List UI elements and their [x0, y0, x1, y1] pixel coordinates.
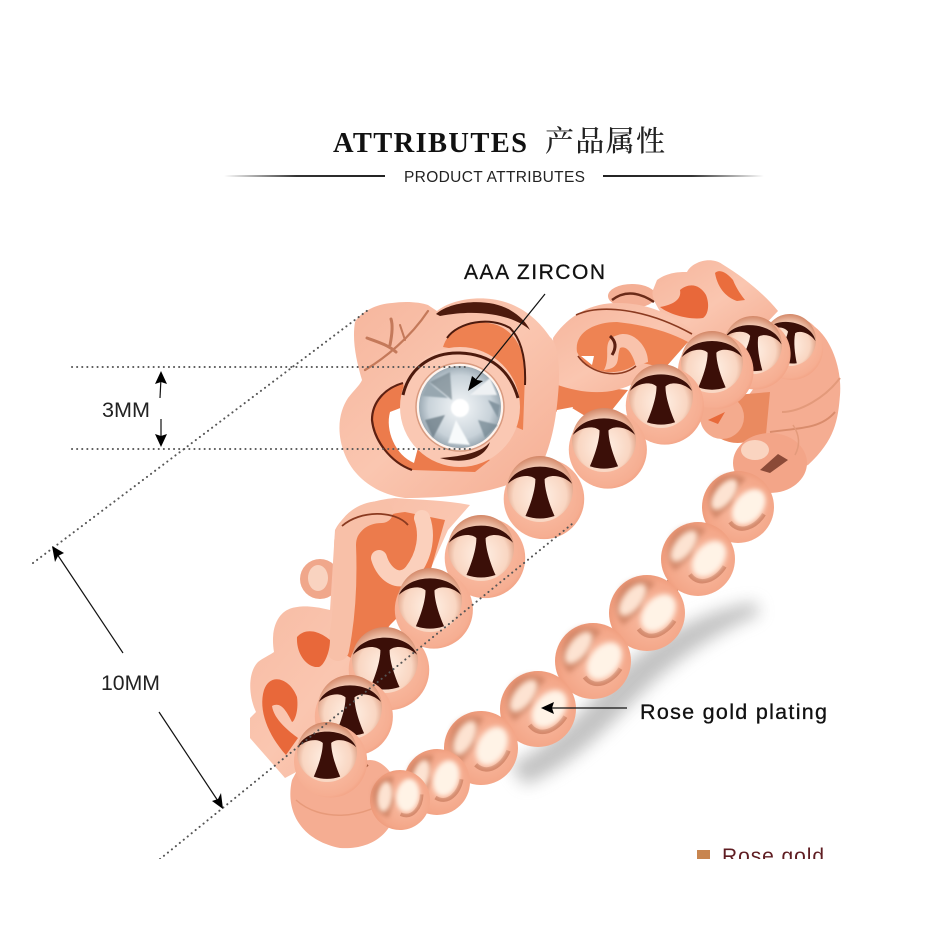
- dimension: 3mm: [102, 371, 167, 447]
- arrow: [541, 702, 627, 714]
- ring shadow on ground: [510, 602, 760, 785]
- callout: AAA zircon: [464, 261, 605, 391]
- arrow: [468, 294, 545, 391]
- legend label: Rose gold: [722, 845, 824, 868]
- ring illustration: [250, 260, 840, 848]
- label: AAA ZIRCON: [464, 261, 605, 284]
- S strand: [338, 512, 382, 650]
- band beads: [359, 471, 774, 841]
- back of band: far beads: [700, 327, 840, 493]
- back scroll: small beads behind crown: [300, 284, 656, 599]
- arrow up-left: [52, 546, 123, 653]
- legend: rose gold swatch clipped: [697, 845, 824, 868]
- label: Rose gold plating: [640, 700, 827, 724]
- title: attributes: ATTRIBUTES: [333, 128, 527, 159]
- arrow up: [155, 371, 167, 398]
- leaf engraving: [365, 311, 428, 370]
- crown: left scroll with orange interior: [250, 498, 470, 778]
- heading block: [224, 125, 764, 186]
- rule right: [603, 175, 764, 177]
- crown: heart centre: [339, 298, 559, 498]
- connectors between beads: [497, 574, 684, 743]
- orange hollow left of stone: [372, 383, 490, 472]
- arrow down-right: [159, 712, 223, 809]
- crown: right scroll with orange interior: [546, 303, 700, 452]
- crown: top right scroll: [652, 260, 778, 345]
- callout: rose gold plating: [541, 700, 827, 724]
- label 3MM: 3MM: [102, 399, 150, 422]
- top dark streak: [436, 302, 530, 330]
- label 10MM: 10MM: [101, 672, 160, 695]
- zircon stone in bezel: [400, 347, 520, 467]
- arrow down: [155, 419, 167, 447]
- swatch: [697, 850, 710, 860]
- reflective beads on crown rim: [294, 309, 829, 798]
- hook strand: [379, 518, 425, 578]
- title: chinese: 产品属性: [545, 125, 665, 158]
- orange hollow right of stone: [443, 322, 525, 430]
- dimension: 10mm: [52, 546, 223, 809]
- subtitle: PRODUCT ATTRIBUTES: [404, 169, 585, 186]
- rule left: [224, 175, 385, 177]
- white crop strip along the bottom: [0, 859, 952, 952]
- orange behind strip: [556, 383, 628, 425]
- dimension guide lines: [33, 310, 572, 859]
- stacked beads bottom-left: [290, 760, 398, 848]
